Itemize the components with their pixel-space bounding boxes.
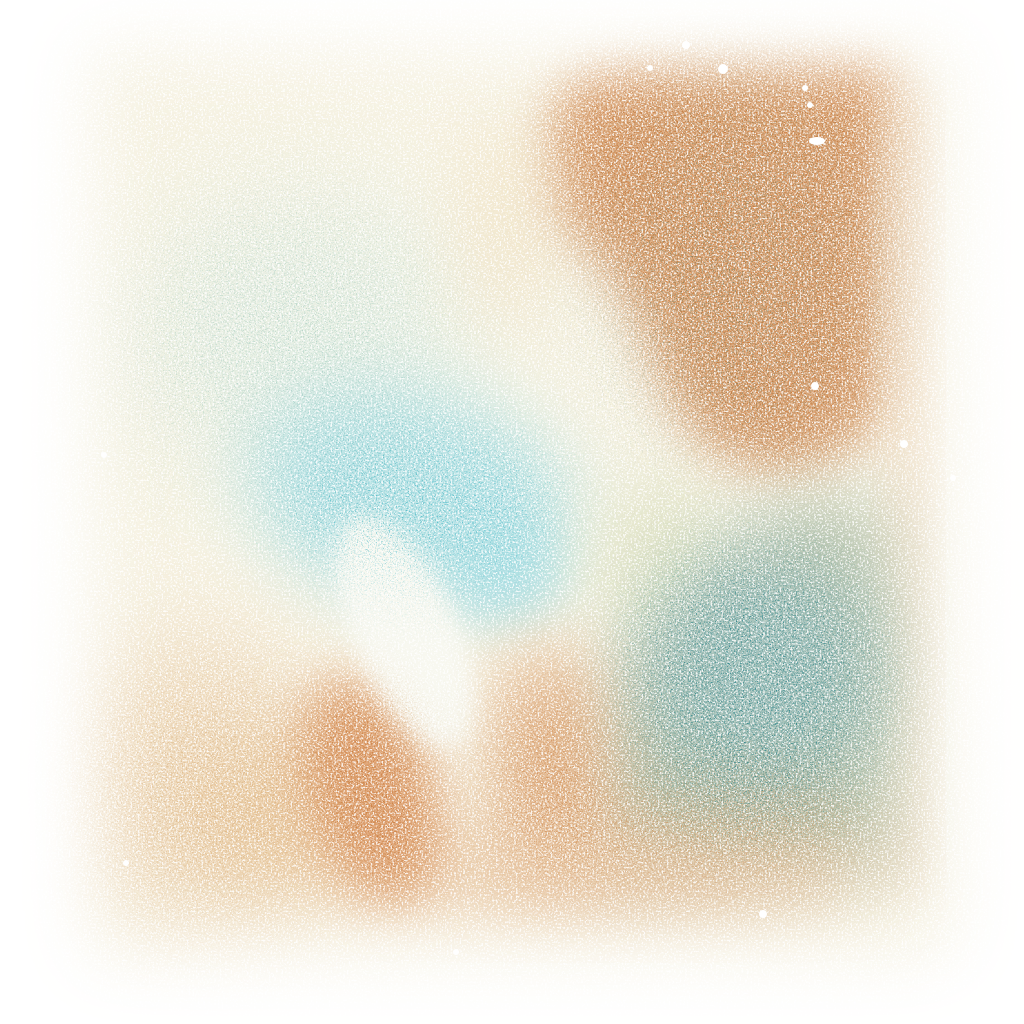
wash: cyan centre: [224, 353, 596, 637]
grain layer: dark warm particles: [90, 65, 885, 910]
wash: cream clear ellipse: [307, 497, 503, 767]
wash: teal patch: [650, 560, 870, 780]
white flecks: scattered highlights in the top-right and margins: [101, 41, 956, 955]
wash: orange bottom-left blob: [275, 661, 465, 919]
particles: dark mix in the orange block: [605, 90, 865, 450]
wash: tan lower-left: [80, 630, 320, 930]
particles: cyan centre: [280, 430, 560, 580]
wash: cyan right lobe: [445, 520, 565, 620]
wash: tan around blob: [190, 740, 410, 900]
grain layer: teal particles: [130, 90, 880, 830]
particles: orange lower-right mix: [520, 780, 880, 880]
wash: right margin tan: [890, 90, 925, 890]
particles: teal haze upper-left: [130, 190, 450, 490]
particles: orange lower-left: [282, 672, 458, 908]
wash: orange bottom centre: [495, 645, 605, 885]
particles: teal lower-right: [630, 550, 880, 830]
particles: orange bottom-centre: [500, 670, 600, 870]
wash: grey-green lower-right: [598, 500, 895, 880]
particles: tan across lower-left: [90, 670, 330, 910]
wash: sage centre: [595, 480, 735, 660]
wash: sand left of the orange block: [460, 110, 560, 330]
wash: orange lower band: [330, 835, 870, 915]
particles: orange upper-right: [555, 65, 885, 465]
wash: pale green upper-left: [176, 236, 444, 416]
wash: orange upper-right block: [555, 60, 895, 470]
